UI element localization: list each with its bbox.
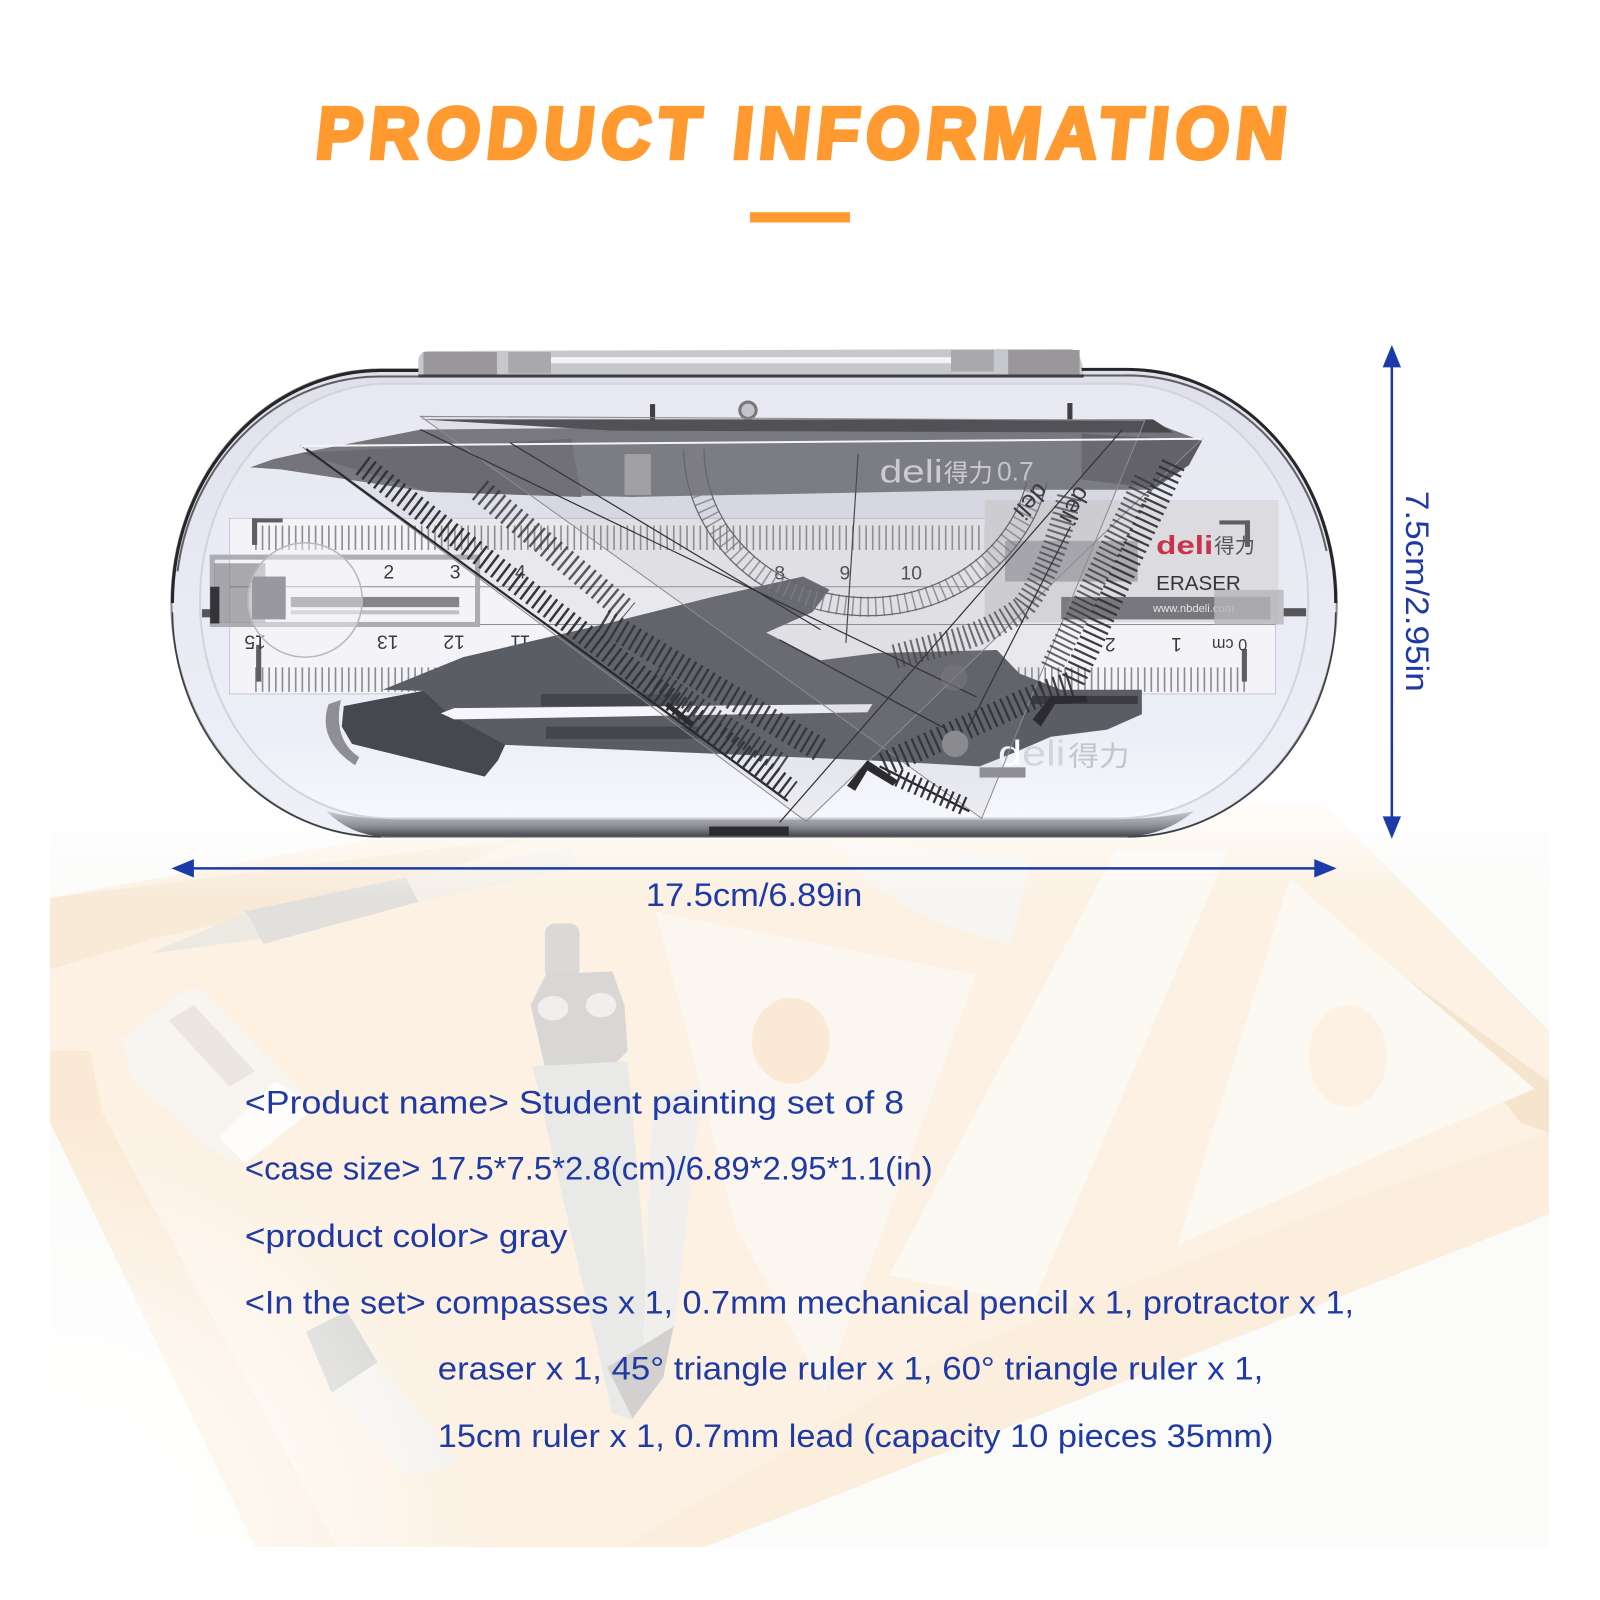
width label: 17.5cm/6.89in	[646, 876, 862, 913]
ruler	[230, 518, 1276, 694]
background eraser	[120, 985, 316, 1163]
compass: deli	[998, 733, 1065, 773]
ruler: 10	[571, 631, 592, 653]
compass: 得力	[1068, 740, 1130, 771]
triangle rulers: deli	[1008, 478, 1053, 524]
background pencil	[149, 870, 446, 954]
specification text block	[245, 1083, 1354, 1454]
ruler: 13	[377, 631, 399, 653]
height label: 7.5cm/2.95in	[1399, 491, 1436, 692]
eraser: ERASER	[1156, 573, 1241, 595]
case size line: <case size> 17.5*7.5*2.8(cm)/6.89*2.95*1.1(in)	[245, 1150, 933, 1187]
ruler: 9	[840, 563, 850, 585]
mechanical pencil: 得力	[944, 460, 993, 488]
ruler: 2	[1105, 633, 1116, 655]
ruler: 11	[510, 631, 530, 653]
title: PRODUCT INFORMATION	[313, 94, 1290, 175]
background triangle rulers	[656, 842, 1535, 1390]
lead box	[202, 543, 478, 657]
set contents line 3: 15cm ruler x 1, 0.7mm lead (capacity 10 pieces 35mm)	[438, 1417, 1273, 1454]
triangle rulers: deli	[1053, 482, 1095, 528]
product photo: transparent geometry set case	[171, 349, 1337, 837]
width arrow	[171, 859, 1337, 878]
mechanical pencil: 0.7	[997, 457, 1034, 487]
compass	[326, 577, 1142, 778]
white fades	[76, 1174, 389, 1547]
eraser: deli	[1156, 532, 1213, 560]
eraser	[985, 500, 1306, 624]
ruler: 4	[515, 562, 526, 584]
background photo: stationery on wooden tray	[50, 820, 1549, 1547]
set contents line 2: eraser x 1, 45° triangle ruler x 1, 60° triangle ruler x 1,	[438, 1350, 1263, 1387]
set contents line 1: <In the set> compasses x 1, 0.7mm mechanical pencil x 1, protractor x 1,	[245, 1283, 1354, 1320]
protractor	[684, 449, 1047, 643]
case hinge	[418, 349, 1084, 378]
triangle rulers	[301, 416, 1202, 822]
ruler: 15	[1238, 563, 1260, 585]
ruler: 15	[244, 631, 266, 653]
product color line: <product color> gray	[245, 1217, 568, 1254]
mechanical pencil	[250, 402, 1202, 497]
ruler: 2	[383, 562, 394, 584]
background lead case	[306, 1311, 459, 1477]
product name line: <Product name> Student painting set of 8	[245, 1083, 904, 1120]
ruler: 0 cm	[1212, 635, 1247, 653]
ruler: 10	[900, 563, 922, 585]
ruler: 1	[1171, 633, 1182, 655]
wooden tray	[50, 776, 1549, 1547]
case bottom rim	[327, 811, 1194, 837]
mechanical pencil: deli	[880, 453, 943, 490]
ruler: 3	[450, 562, 460, 584]
case shell	[171, 369, 1337, 837]
ruler: 8	[774, 563, 785, 585]
eraser: www.nbdeli.com	[1152, 603, 1234, 615]
ruler: 12	[443, 631, 465, 653]
background compass	[531, 923, 702, 1420]
height arrow	[1383, 345, 1401, 839]
case dark rim	[172, 369, 1336, 837]
title underline	[750, 212, 850, 222]
ruler: 14	[1166, 563, 1188, 585]
eraser: 得力	[1214, 535, 1255, 558]
